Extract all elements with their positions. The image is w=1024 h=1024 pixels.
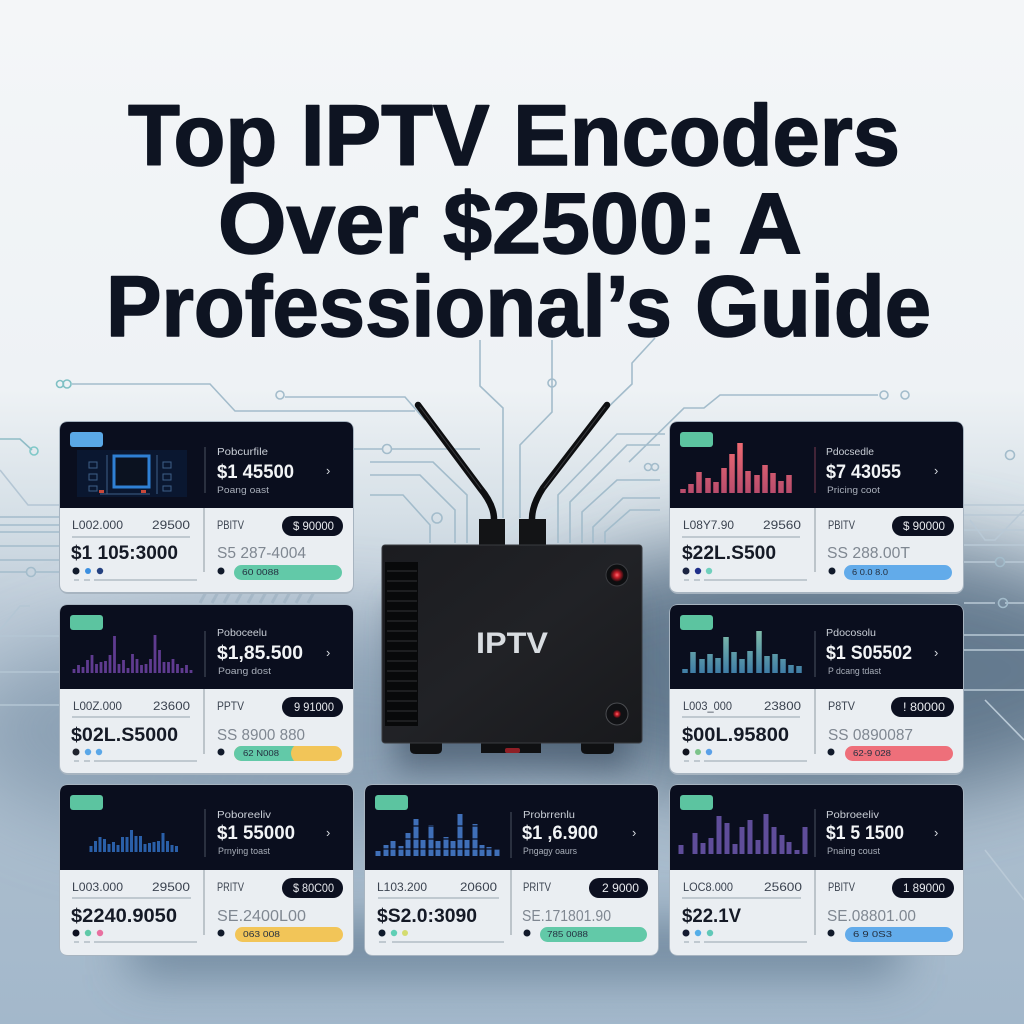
price: $7 43055 [826, 461, 901, 483]
IPTV label: P8TV [828, 699, 855, 713]
large value: $S2.0:3090 [377, 905, 477, 927]
divider [204, 631, 206, 677]
price pill [282, 697, 343, 717]
badge [375, 795, 408, 810]
price: $1,85.500 [217, 642, 303, 664]
column divider [814, 870, 816, 935]
slider [684, 760, 807, 762]
price pill [282, 516, 343, 536]
badge [70, 615, 103, 630]
circuit traces [0, 338, 1024, 900]
IPTV label: PRITV [217, 880, 244, 894]
bar chart [91, 830, 176, 852]
arrow: › [934, 463, 938, 478]
rule [682, 536, 800, 538]
column divider [814, 508, 816, 572]
status dots [682, 930, 713, 936]
column divider [203, 689, 205, 754]
product label: Pdocosolu [826, 627, 876, 639]
divider [510, 812, 512, 858]
product label: Poboceelu [217, 627, 267, 639]
price: $1 ,6.900 [522, 822, 598, 844]
spec label: L003_000 [683, 699, 732, 713]
arrow: › [632, 825, 636, 840]
IPTV label: PPTV [217, 699, 244, 713]
rule [378, 897, 499, 899]
dot [218, 748, 224, 756]
dot [218, 930, 224, 936]
large value: $22.1V [682, 905, 741, 927]
dot [828, 748, 834, 756]
divider [814, 631, 816, 677]
spec value: 23800 [764, 699, 801, 713]
divider [814, 809, 816, 857]
panel: encoder card 1 [59, 421, 354, 594]
IPTV label: PBITV [828, 518, 855, 532]
price pill [589, 878, 648, 898]
price pill: 2 9000 [602, 881, 639, 895]
column divider [814, 689, 816, 754]
status bar [540, 927, 647, 942]
product label: Poboreeliv [217, 809, 272, 821]
badge [680, 795, 713, 810]
large value: $22L.S500 [682, 542, 776, 564]
device: IPTV encoder [382, 405, 642, 770]
sub label: Pricing coot [827, 485, 880, 496]
spec label: L002.000 [72, 518, 123, 532]
divider [204, 447, 206, 493]
LED: bottom [606, 703, 628, 725]
status bar: 62-9 028 [853, 748, 891, 758]
large value: $1 105:3000 [71, 542, 178, 564]
vent [385, 562, 418, 726]
arrow: › [934, 825, 938, 840]
grey value: SS 288.00T [827, 545, 910, 562]
column divider [203, 870, 205, 935]
slider [684, 579, 807, 581]
price: $1 S05502 [826, 642, 912, 664]
bar chart [685, 631, 799, 673]
title: Professional’s Guide [106, 259, 931, 355]
grey value: SS 8900 880 [217, 727, 305, 744]
grey value: SE.08801.00 [827, 908, 916, 925]
price pill: ! 80000 [903, 700, 945, 714]
product label: Probrrenlu [523, 809, 575, 821]
status dots [378, 930, 408, 936]
bar chart [74, 635, 191, 673]
panel: encoder card 3 [59, 604, 354, 775]
IPTV label: PBITV [217, 518, 244, 532]
grey value: S5 287-4004 [217, 545, 306, 562]
price pill [891, 697, 954, 717]
sub label: Prnying toast [218, 846, 270, 857]
title: Over $2500: A [218, 176, 802, 272]
title: Top IPTV Encoders [128, 88, 900, 184]
slider [684, 941, 807, 943]
dot [828, 930, 834, 936]
device label: IPTV [476, 627, 548, 660]
IPTV label: PRITV [523, 880, 551, 894]
status bar: 62 N008 [243, 748, 279, 758]
panel: encoder card 5 [59, 784, 354, 956]
rule [72, 716, 190, 718]
bar chart [681, 814, 805, 854]
slider [379, 941, 504, 943]
panel: encoder card 6 [364, 784, 659, 956]
price pill: $ 90000 [293, 519, 334, 533]
red connector [505, 748, 520, 753]
device screen thumbnail [77, 450, 187, 497]
price pill: $ 90000 [903, 519, 945, 533]
spec value: 29560 [763, 518, 801, 532]
sub label: Pnaing coust [827, 846, 880, 857]
rule [682, 897, 801, 899]
status bar [234, 746, 342, 761]
product label: Pobcurfile [217, 446, 268, 458]
sub label: Pngagy oaurs [523, 846, 577, 857]
panel: encoder card 4 [669, 604, 964, 775]
spec value: 29500 [152, 518, 190, 532]
status bar: 785 0088 [547, 929, 588, 939]
rule [682, 716, 800, 718]
bar chart [374, 814, 501, 856]
price pill: 1 89000 [903, 881, 945, 895]
badge [680, 615, 713, 630]
slider [74, 579, 197, 581]
dot [828, 568, 836, 574]
status bar: 6 0.0 8.0 [852, 567, 888, 577]
arrow: › [326, 645, 330, 660]
dot [218, 568, 224, 574]
status bar: 6 9 0S3 [853, 929, 892, 939]
arrow: › [934, 645, 938, 660]
dot [524, 930, 530, 936]
large value: $00L.95800 [682, 724, 789, 746]
price: $1 55000 [217, 822, 295, 844]
spec value: 20600 [460, 880, 497, 894]
badge [70, 795, 103, 810]
price pill: $ 80C00 [293, 881, 334, 895]
spec label: L103.200 [377, 880, 427, 894]
spec label: L003.000 [72, 880, 123, 894]
status dots [72, 930, 103, 936]
panel: encoder card 2 [669, 421, 964, 594]
grey value: SE.2400L00 [217, 908, 306, 925]
spec value: 23600 [153, 699, 190, 713]
sub label: Poang oast [217, 485, 269, 496]
status bar: 60 0088 [242, 567, 279, 577]
badge [680, 432, 713, 447]
price pill [892, 516, 954, 536]
sub label: P dcang tdast [828, 666, 881, 677]
LED: top [606, 564, 628, 586]
device body [382, 545, 642, 743]
antenna: right [532, 405, 607, 519]
status bar [845, 746, 953, 761]
spec value: 29500 [152, 880, 190, 894]
column divider [203, 508, 205, 572]
price pill [892, 878, 954, 898]
arrow: › [326, 825, 330, 840]
status dots [682, 568, 712, 574]
status dots [682, 748, 712, 756]
rule [72, 897, 191, 899]
spec value: 25600 [764, 880, 802, 894]
status bar [845, 927, 953, 942]
rule [72, 536, 190, 538]
status bar: 063 008 [243, 929, 280, 939]
status bar [234, 565, 342, 580]
grey value: SE.171801.90 [522, 908, 611, 925]
slider [74, 760, 197, 762]
antenna: left [418, 405, 494, 519]
panel: encoder card 7 [669, 784, 964, 956]
status bar [844, 565, 952, 580]
large value: $02L.S5000 [71, 724, 178, 746]
status dots [72, 748, 102, 756]
price: $1 5 1500 [826, 822, 904, 844]
product label: Pdocsedle [826, 446, 874, 458]
badge [70, 432, 103, 447]
IPTV label: PBITV [828, 880, 855, 894]
title [106, 88, 931, 355]
slider [74, 941, 197, 943]
divider [814, 447, 816, 493]
product label: Pobroeeliv [826, 809, 880, 821]
price pill: 9 91000 [294, 700, 334, 714]
large value: $2240.9050 [71, 905, 177, 927]
price pill [282, 878, 343, 898]
status bar [235, 927, 343, 942]
column divider [510, 870, 512, 935]
status dots [72, 568, 103, 574]
divider [204, 809, 206, 857]
price: $1 45500 [217, 461, 294, 483]
spec label: L00Z.000 [73, 699, 122, 713]
antenna connectors [479, 519, 546, 546]
arrow: › [326, 463, 330, 478]
spec label: LOC8.000 [683, 880, 733, 894]
grey value: SS 0890087 [828, 727, 913, 744]
bar chart [683, 443, 789, 493]
spec label: L08Y7.90 [683, 518, 734, 532]
feet [410, 743, 614, 754]
sub label: Poang dost [218, 666, 271, 677]
